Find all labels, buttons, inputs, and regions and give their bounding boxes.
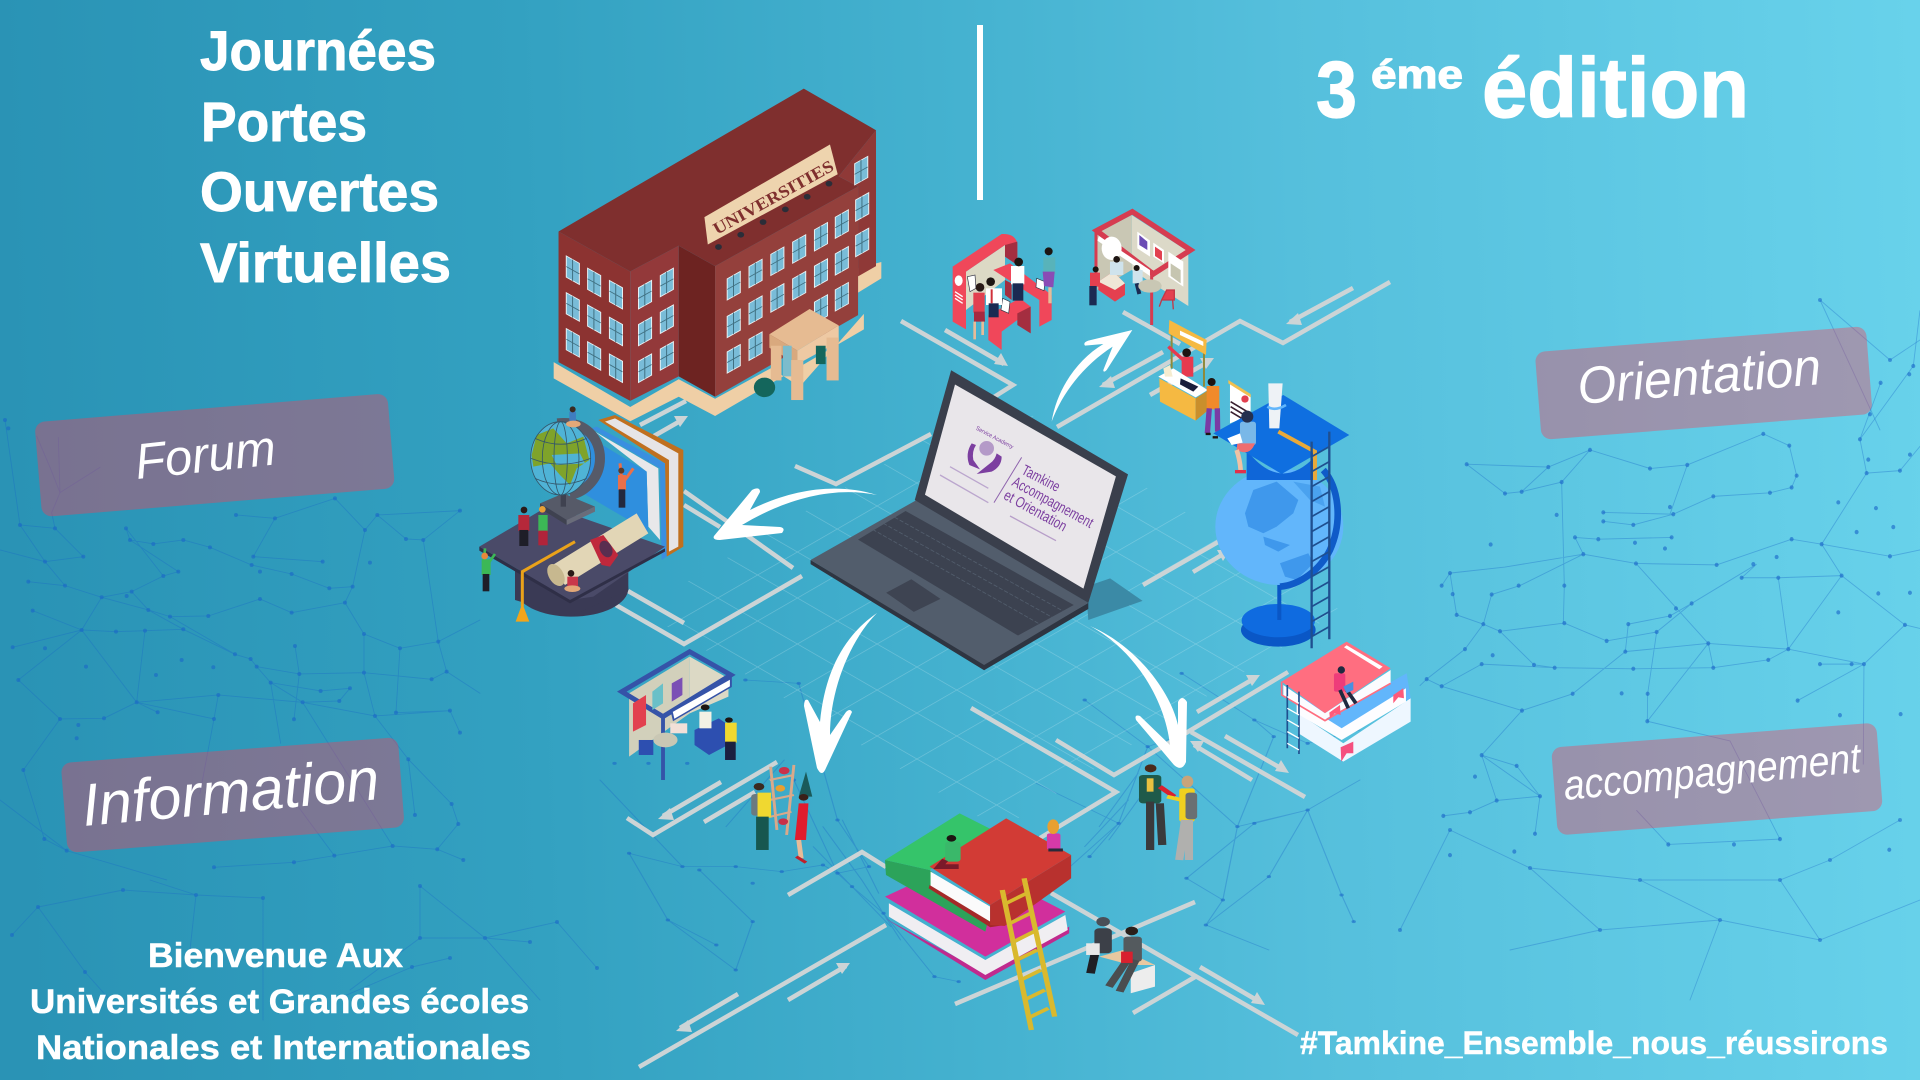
illustration: blue globe with graduation cap [1213, 380, 1411, 762]
booth: red frame stand [1089, 212, 1191, 325]
illustration: university building [554, 89, 881, 421]
title: Journées Portes Ouvertes Virtuelles: Virtuelles [200, 231, 451, 294]
man with backpack [751, 783, 771, 850]
gold ladder [1002, 878, 1055, 1030]
welcome text: Nationales et Internationales [36, 1029, 531, 1067]
title: Journées Portes Ouvertes Virtuelles [200, 19, 451, 294]
screen content: Tamkine logo and text: Service Academy [974, 426, 1014, 451]
woman in red dress [795, 794, 808, 863]
panel: Information: Information [79, 745, 382, 839]
panel: Forum [34, 393, 395, 517]
white curved arrow: to lower right [1090, 626, 1187, 768]
booth figures [973, 247, 1055, 339]
panel: Orientation [1535, 326, 1873, 440]
white curved arrow: to booths [1052, 330, 1132, 422]
illustration: laptop [811, 370, 1143, 670]
diploma [544, 513, 648, 589]
cap board [479, 506, 665, 603]
edition heading: 3 [1316, 45, 1357, 134]
tassel [522, 542, 575, 607]
illustration: navy exhibition booth [622, 652, 737, 780]
sign text: UNIVERSITIES: UNIVERSITIES [710, 156, 837, 238]
screen content: Tamkine logo and text: Accompagnement [1009, 474, 1097, 532]
windows [566, 156, 869, 382]
figures: two people on a bench [1086, 917, 1155, 993]
welcome text: Bienvenue Aux [148, 937, 403, 975]
orange stall [1158, 320, 1219, 437]
booth: red curved stand [953, 234, 1052, 350]
title: Journées Portes Ouvertes Virtuelles: Ouvertes [200, 160, 439, 223]
reader on books [1334, 666, 1356, 708]
illustration: graduation cap, globe and book [479, 406, 683, 622]
white curved arrow: to cap and globe [714, 488, 877, 540]
screen content: Tamkine logo and text [940, 426, 1097, 541]
tall ladder [1312, 432, 1329, 648]
edition heading: édition [1482, 41, 1749, 135]
title: Journées Portes Ouvertes Virtuelles: Portes [201, 90, 367, 153]
welcome text: Universités et Grandes écoles [30, 983, 529, 1021]
magenta book [885, 885, 1069, 980]
rack [770, 765, 794, 835]
edition heading [1316, 41, 1749, 135]
laptop base [811, 499, 1088, 670]
stack of books [1282, 642, 1411, 762]
sign [704, 144, 838, 250]
panel: Orientation: Orientation [1575, 338, 1823, 416]
small ladder [1287, 685, 1299, 754]
illustration: exhibition booths and stall [953, 212, 1219, 437]
figure reading on cap [1227, 411, 1256, 472]
logo hands [968, 441, 1002, 474]
red book [929, 818, 1071, 927]
edition heading: éme [1371, 53, 1463, 97]
circuit lines with small arrows [616, 282, 1390, 1067]
portico [769, 309, 839, 400]
hanging figure [481, 548, 495, 591]
figures near display rack [751, 765, 812, 863]
figure reading in pink [1047, 819, 1063, 850]
info poster [1228, 380, 1251, 423]
globe base [1241, 580, 1316, 647]
illustration: stack of books with figures and ladder [885, 813, 1071, 1030]
green book [885, 813, 993, 932]
isometric grid floor [640, 395, 1340, 830]
laptop screen [915, 370, 1128, 603]
divider line [977, 25, 983, 200]
open book [583, 415, 683, 560]
book figure [618, 463, 633, 508]
panel: accompagnement: accompagnement [1561, 734, 1865, 809]
title: Journées Portes Ouvertes Virtuelles: Journées [200, 19, 436, 82]
screen content: Tamkine logo and text: et Orientation [1001, 487, 1070, 535]
globe sphere [1215, 468, 1343, 587]
panel: accompagnement [1551, 723, 1883, 835]
screen content: Tamkine logo and text: Tamkine [1019, 462, 1063, 496]
figure in green [939, 835, 961, 867]
hashtag: #Tamkine_Ensemble_nous_réussirons [1300, 1025, 1888, 1061]
seated figure on globe [566, 406, 581, 427]
network mesh background [0, 300, 1920, 1020]
panel: Forum: Forum [132, 420, 278, 490]
laptop shadow [1086, 578, 1143, 620]
welcome text [30, 937, 531, 1067]
two standing figures [518, 506, 548, 546]
seated figure on board [564, 570, 580, 592]
graduation cap [1213, 383, 1349, 480]
figures: two people talking [1139, 764, 1197, 860]
globe [531, 422, 600, 525]
white curved arrow: to lower left [804, 613, 877, 773]
